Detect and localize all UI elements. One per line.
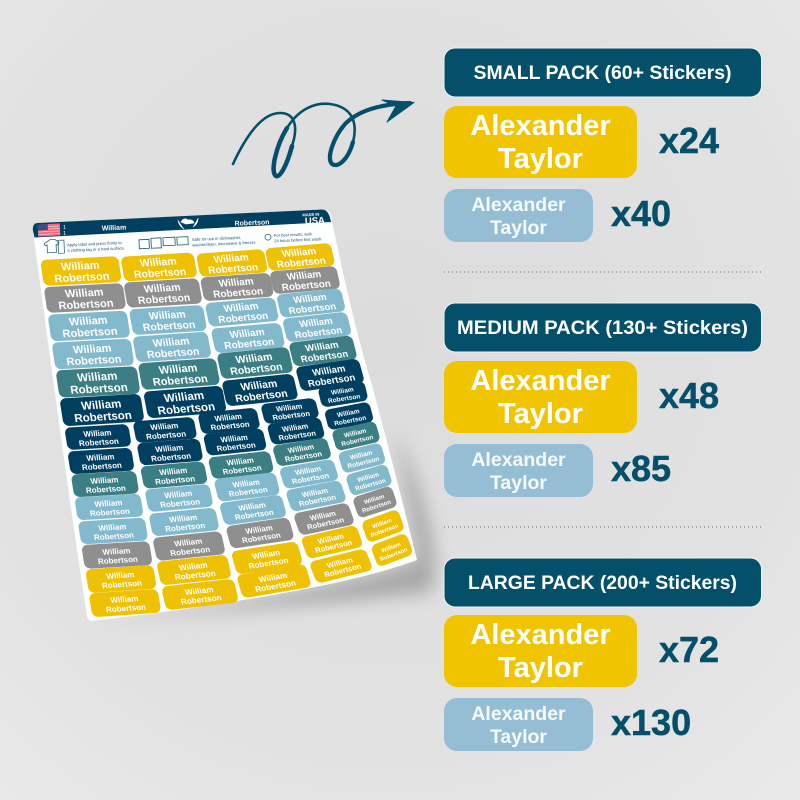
stickers row 4: light blue: Robertson (223, 337, 275, 352)
panel: large pack (444, 558, 762, 751)
stickers row 4: light blue: Robertson (146, 346, 200, 361)
icon: shirt and bottle (44, 239, 64, 254)
stickers row 1: yellow: William (281, 246, 318, 260)
large sticker sample (444, 615, 637, 687)
stickers row 12: gray small: Robertson (362, 500, 392, 515)
stickers row 12: gray small: William (309, 509, 337, 523)
stickers row 5: teal: William (304, 340, 340, 354)
stickers row 5: teal (57, 336, 357, 397)
sheet header band: USA (305, 215, 325, 227)
medium pack heading (444, 303, 762, 352)
stickers row 11: light blue small: Robertson (234, 508, 275, 522)
stickers row 10: light blue small: William (294, 464, 322, 477)
stickers row 14: yellow small: Robertson (323, 562, 363, 579)
large sticker sample: Alexander (470, 619, 611, 651)
stickers row 9: teal small: William (158, 466, 188, 477)
stickers row 13: yellow small: William (372, 518, 393, 530)
stickers row 8: navy small: Robertson (334, 415, 367, 428)
sheet instructions: Safe for use in dishwasher, (192, 235, 241, 242)
stickers row 7: navy small: Robertson (145, 429, 187, 441)
small sticker count: x40 (611, 193, 671, 234)
stickers row 8: navy small: Robertson (278, 429, 317, 443)
stickers row 11: light blue small: Robertson (298, 493, 338, 508)
stickers row 7: navy small: Robertson (210, 420, 251, 432)
large sticker sample: Alexander (470, 110, 611, 142)
stickers row 14: yellow small: Robertson (379, 547, 409, 563)
stickers row 1: yellow: Robertson (54, 271, 111, 285)
stickers row 8: navy small: Robertson (216, 440, 257, 453)
stickers row 4: light blue: William (229, 327, 266, 341)
small sticker sample: Alexander (471, 703, 566, 725)
stickers row 10: light blue small: Robertson (228, 485, 269, 499)
stickers row 8: navy small: Robertson (150, 451, 192, 463)
small sticker sample: Taylor (490, 472, 547, 494)
stickers row 13: yellow small: Robertson (248, 556, 290, 571)
stickers row 1: yellow: Robertson (207, 262, 259, 277)
small sticker sample (444, 444, 593, 497)
stickers row 14: yellow small: Robertson (105, 603, 147, 614)
stickers row 12: gray small: Robertson (169, 545, 211, 558)
stickers row 4: light blue (53, 313, 351, 369)
stickers row 13: yellow small: William (251, 548, 281, 561)
stickers row 11: light blue small: Robertson (164, 521, 206, 534)
stickers row 1: yellow: Robertson (133, 266, 187, 281)
hand-drawn arrow (233, 100, 414, 176)
stickers row 4: light blue: William (72, 343, 113, 356)
stickers row 2: gray: Robertson (281, 279, 332, 294)
stickers row 7: navy small (65, 381, 367, 449)
stickers row 14: yellow small: Robertson (254, 579, 297, 594)
icon: flag (38, 223, 60, 237)
stickers row 5: teal: William (158, 362, 199, 377)
stickers row 2: gray: William (218, 276, 255, 290)
stickers row 3: light blue: Robertson (62, 326, 119, 340)
icon: clock (265, 234, 271, 240)
stickers row 2: gray: Robertson (212, 286, 264, 301)
stickers row 2: gray: Robertson (137, 292, 191, 307)
large sticker sample (444, 106, 637, 178)
large sticker sample: Taylor (498, 398, 583, 430)
medium pack heading: MEDIUM PACK (130+ Stickers) (457, 318, 748, 339)
stickers row 12: gray small: Robertson (306, 515, 346, 532)
stickers row 13: yellow small: Robertson (370, 523, 400, 539)
stickers row 8: navy small: William (86, 452, 115, 463)
sheet instructions: For best results, wait (274, 231, 313, 238)
large sticker sample: Alexander (470, 365, 611, 397)
stickers row 5: teal: Robertson (229, 361, 284, 378)
stickers row 11: light blue small: William (168, 513, 198, 524)
stickers row 13: yellow small: Robertson (174, 569, 217, 582)
sheet instructions: washer/dryer, microwave & freezer. (192, 240, 256, 247)
stickers row 3: light blue: William (68, 315, 109, 328)
stickers row 10: light blue small: Robertson (159, 497, 201, 510)
stickers row 12: gray small: Robertson (241, 531, 282, 545)
stickers row 9: teal small (72, 422, 380, 496)
stickers row 13: yellow small: Robertson (314, 538, 354, 555)
stickers row 9: teal small: Robertson (222, 463, 263, 477)
stickers row 2: gray: William (64, 287, 105, 300)
stickers row 2: gray (45, 267, 340, 313)
stickers row 3: light blue: Robertson (142, 319, 196, 334)
stickers row 6: navy: William (239, 378, 279, 393)
stickers row 14: yellow small: William (381, 542, 402, 555)
stickers row 4: light blue: William (298, 316, 334, 330)
stickers row 9: teal small: Robertson (154, 474, 196, 487)
stickers row 10: light blue small: Robertson (347, 456, 380, 470)
stickers row 7: navy small: William (214, 412, 243, 423)
large pack heading: LARGE PACK (200+ Stickers) (468, 573, 737, 594)
small sticker sample: Alexander (471, 449, 566, 471)
small pack heading: SMALL PACK (60+ Stickers) (474, 63, 732, 84)
stickers row 9: teal small: William (343, 428, 368, 440)
large sticker count: x24 (659, 120, 719, 161)
sheet header band: Robertson (234, 219, 270, 228)
panel: small pack (444, 48, 762, 242)
stickers row 5: teal: Robertson (152, 373, 209, 389)
stickers row 10: light blue small: Robertson (89, 507, 131, 518)
stickers row 11: light blue small: Robertson (354, 477, 387, 493)
stickers row 9: teal small: William (287, 442, 315, 455)
stickers row 6: navy: Robertson (74, 410, 133, 425)
stickers row 9: teal small: Robertson (341, 434, 374, 448)
stickers row 11: light blue small (79, 465, 392, 543)
stickers row 13: yellow small: Robertson (101, 579, 143, 590)
stickers row 14: yellow small: William (325, 555, 354, 570)
stickers row 10: light blue small: William (94, 498, 123, 509)
stickers row 11: light blue small: William (237, 500, 267, 513)
small sticker count: x85 (611, 448, 671, 489)
stickers row 9: teal small: Robertson (85, 484, 127, 495)
stickers row 6: navy: Robertson (307, 372, 357, 390)
sheet shadow (92, 430, 435, 622)
large pack heading (444, 558, 762, 607)
stickers row 14: yellow small (90, 534, 413, 616)
stickers row 6: navy (61, 360, 364, 426)
stickers row 3: light blue: Robertson (288, 301, 338, 317)
stickers row 12: gray small: Robertson (97, 555, 139, 566)
sheet paper (33, 210, 417, 621)
stickers row 11: light blue small: William (301, 486, 329, 499)
stickers row 12: gray small (82, 487, 397, 568)
stickers row 7: navy small: Robertson (327, 393, 361, 405)
stickers row 7: navy small: William (150, 421, 179, 432)
stickers row 7: navy small: William (330, 386, 355, 397)
large sticker sample: Taylor (498, 652, 583, 684)
stickers row 12: gray small: William (102, 546, 131, 557)
stickers row 14: yellow small: William (184, 585, 214, 597)
stickers row 11: light blue small: William (98, 522, 127, 533)
stickers row 3: light blue: William (223, 301, 260, 315)
stickers row 11: light blue small: Robertson (93, 531, 135, 542)
stickers row 2: gray: William (143, 282, 182, 296)
icon: turtle logo (178, 218, 198, 229)
stickers row 11: light blue small: William (357, 471, 380, 484)
stickers row 8: navy small (68, 403, 373, 473)
stickers row 5: teal: William (235, 351, 274, 366)
stickers row 10: light blue small: William (232, 478, 261, 490)
stickers row 14: yellow small: Robertson (180, 593, 223, 607)
stickers row 2: gray: Robertson (58, 298, 115, 312)
sheet header band: 1 (63, 225, 66, 231)
stickers row 4: light blue: Robertson (294, 325, 344, 341)
stickers row 14: yellow small: William (258, 571, 288, 584)
stickers row 5: teal: Robertson (300, 349, 350, 365)
stickers row 5: teal: William (76, 371, 118, 385)
stickers row 12: gray small: William (173, 537, 203, 548)
small pack heading (444, 48, 762, 97)
small sticker sample (444, 698, 593, 751)
stickers row 6: navy: William (80, 398, 122, 413)
stickers row 13: yellow small: William (106, 570, 135, 581)
sheet instructions: 24 hours before first wash. (274, 236, 322, 243)
small sticker sample: Alexander (471, 194, 566, 216)
stickers row 1: yellow: William (139, 256, 178, 270)
stickers row 4: light blue: Robertson (66, 354, 123, 368)
stickers row 7: navy small: Robertson (78, 437, 120, 448)
stickers row 10: light blue small: William (163, 489, 193, 500)
stickers row 10: light blue small: Robertson (291, 471, 331, 486)
stickers row 1: yellow: William (213, 252, 250, 266)
small sticker sample: Taylor (490, 217, 547, 239)
large sticker sample (444, 361, 637, 433)
sheet instructions (44, 228, 322, 254)
stickers row 12: gray small: William (363, 494, 385, 506)
stickers row 7: navy small: Robertson (271, 409, 311, 422)
stickers row 1: yellow: William (60, 260, 101, 273)
sheet instructions: a clothing tag or a hard surface. (67, 245, 125, 253)
stickers row 3: light blue: William (292, 292, 328, 306)
stickers row 2: gray: William (286, 269, 323, 283)
stickers row 13: yellow small: William (178, 561, 208, 572)
stickers row 7: navy small: William (83, 428, 112, 439)
sheet instructions: Apply label and press firmly to (67, 240, 122, 247)
stickers row 9: teal small: Robertson (284, 449, 324, 464)
stickers row 6: navy: Robertson (157, 401, 216, 418)
stickers row 8: navy small: Robertson (81, 461, 123, 472)
stickers row 3: light blue (49, 289, 345, 341)
stickers row 8: navy small: William (220, 433, 249, 444)
stickers row 10: light blue small (75, 443, 385, 519)
stickers row 4: light blue: William (152, 335, 191, 350)
stickers row 13: yellow small (86, 510, 404, 592)
stickers row 9: teal small: William (90, 475, 119, 486)
stickers row 6: navy: William (163, 390, 205, 405)
sheet header band: William (102, 224, 126, 233)
large sticker count: x48 (659, 375, 719, 416)
stickers row 8: navy small: William (155, 443, 184, 454)
stickers row 3: light blue: William (148, 309, 187, 323)
stickers row 5: teal: Robertson (70, 382, 129, 397)
sticker sheet (33, 210, 417, 621)
icon: appliances (139, 237, 188, 249)
sheet header band (33, 210, 331, 238)
stickers row 7: navy small: William (275, 402, 304, 414)
large sticker count: x72 (659, 629, 719, 670)
stickers row 6: navy: Robertson (234, 388, 289, 405)
small sticker count: x130 (611, 702, 691, 743)
large sticker sample: Taylor (498, 143, 583, 175)
stickers row 8: navy small: William (281, 421, 310, 434)
stickers row 14: yellow small: William (110, 594, 139, 605)
panel: medium pack (444, 303, 762, 497)
small sticker sample (444, 189, 593, 242)
stickers row 9: teal small: William (226, 456, 255, 468)
stickers row 12: gray small: William (244, 523, 274, 536)
stickers row 1: yellow: Robertson (276, 256, 327, 271)
stickers row 1: yellow (41, 244, 334, 286)
stickers row 8: navy small: William (336, 408, 361, 419)
stickers row 13: yellow small: William (316, 531, 345, 546)
sheet header band: MADE IN (302, 212, 320, 217)
stickers row 3: light blue: Robertson (217, 311, 269, 326)
sheet header band: 1 (63, 231, 66, 237)
small sticker sample: Taylor (490, 726, 547, 748)
stickers row 6: navy: William (311, 363, 347, 379)
stickers row 10: light blue small: William (349, 449, 374, 462)
